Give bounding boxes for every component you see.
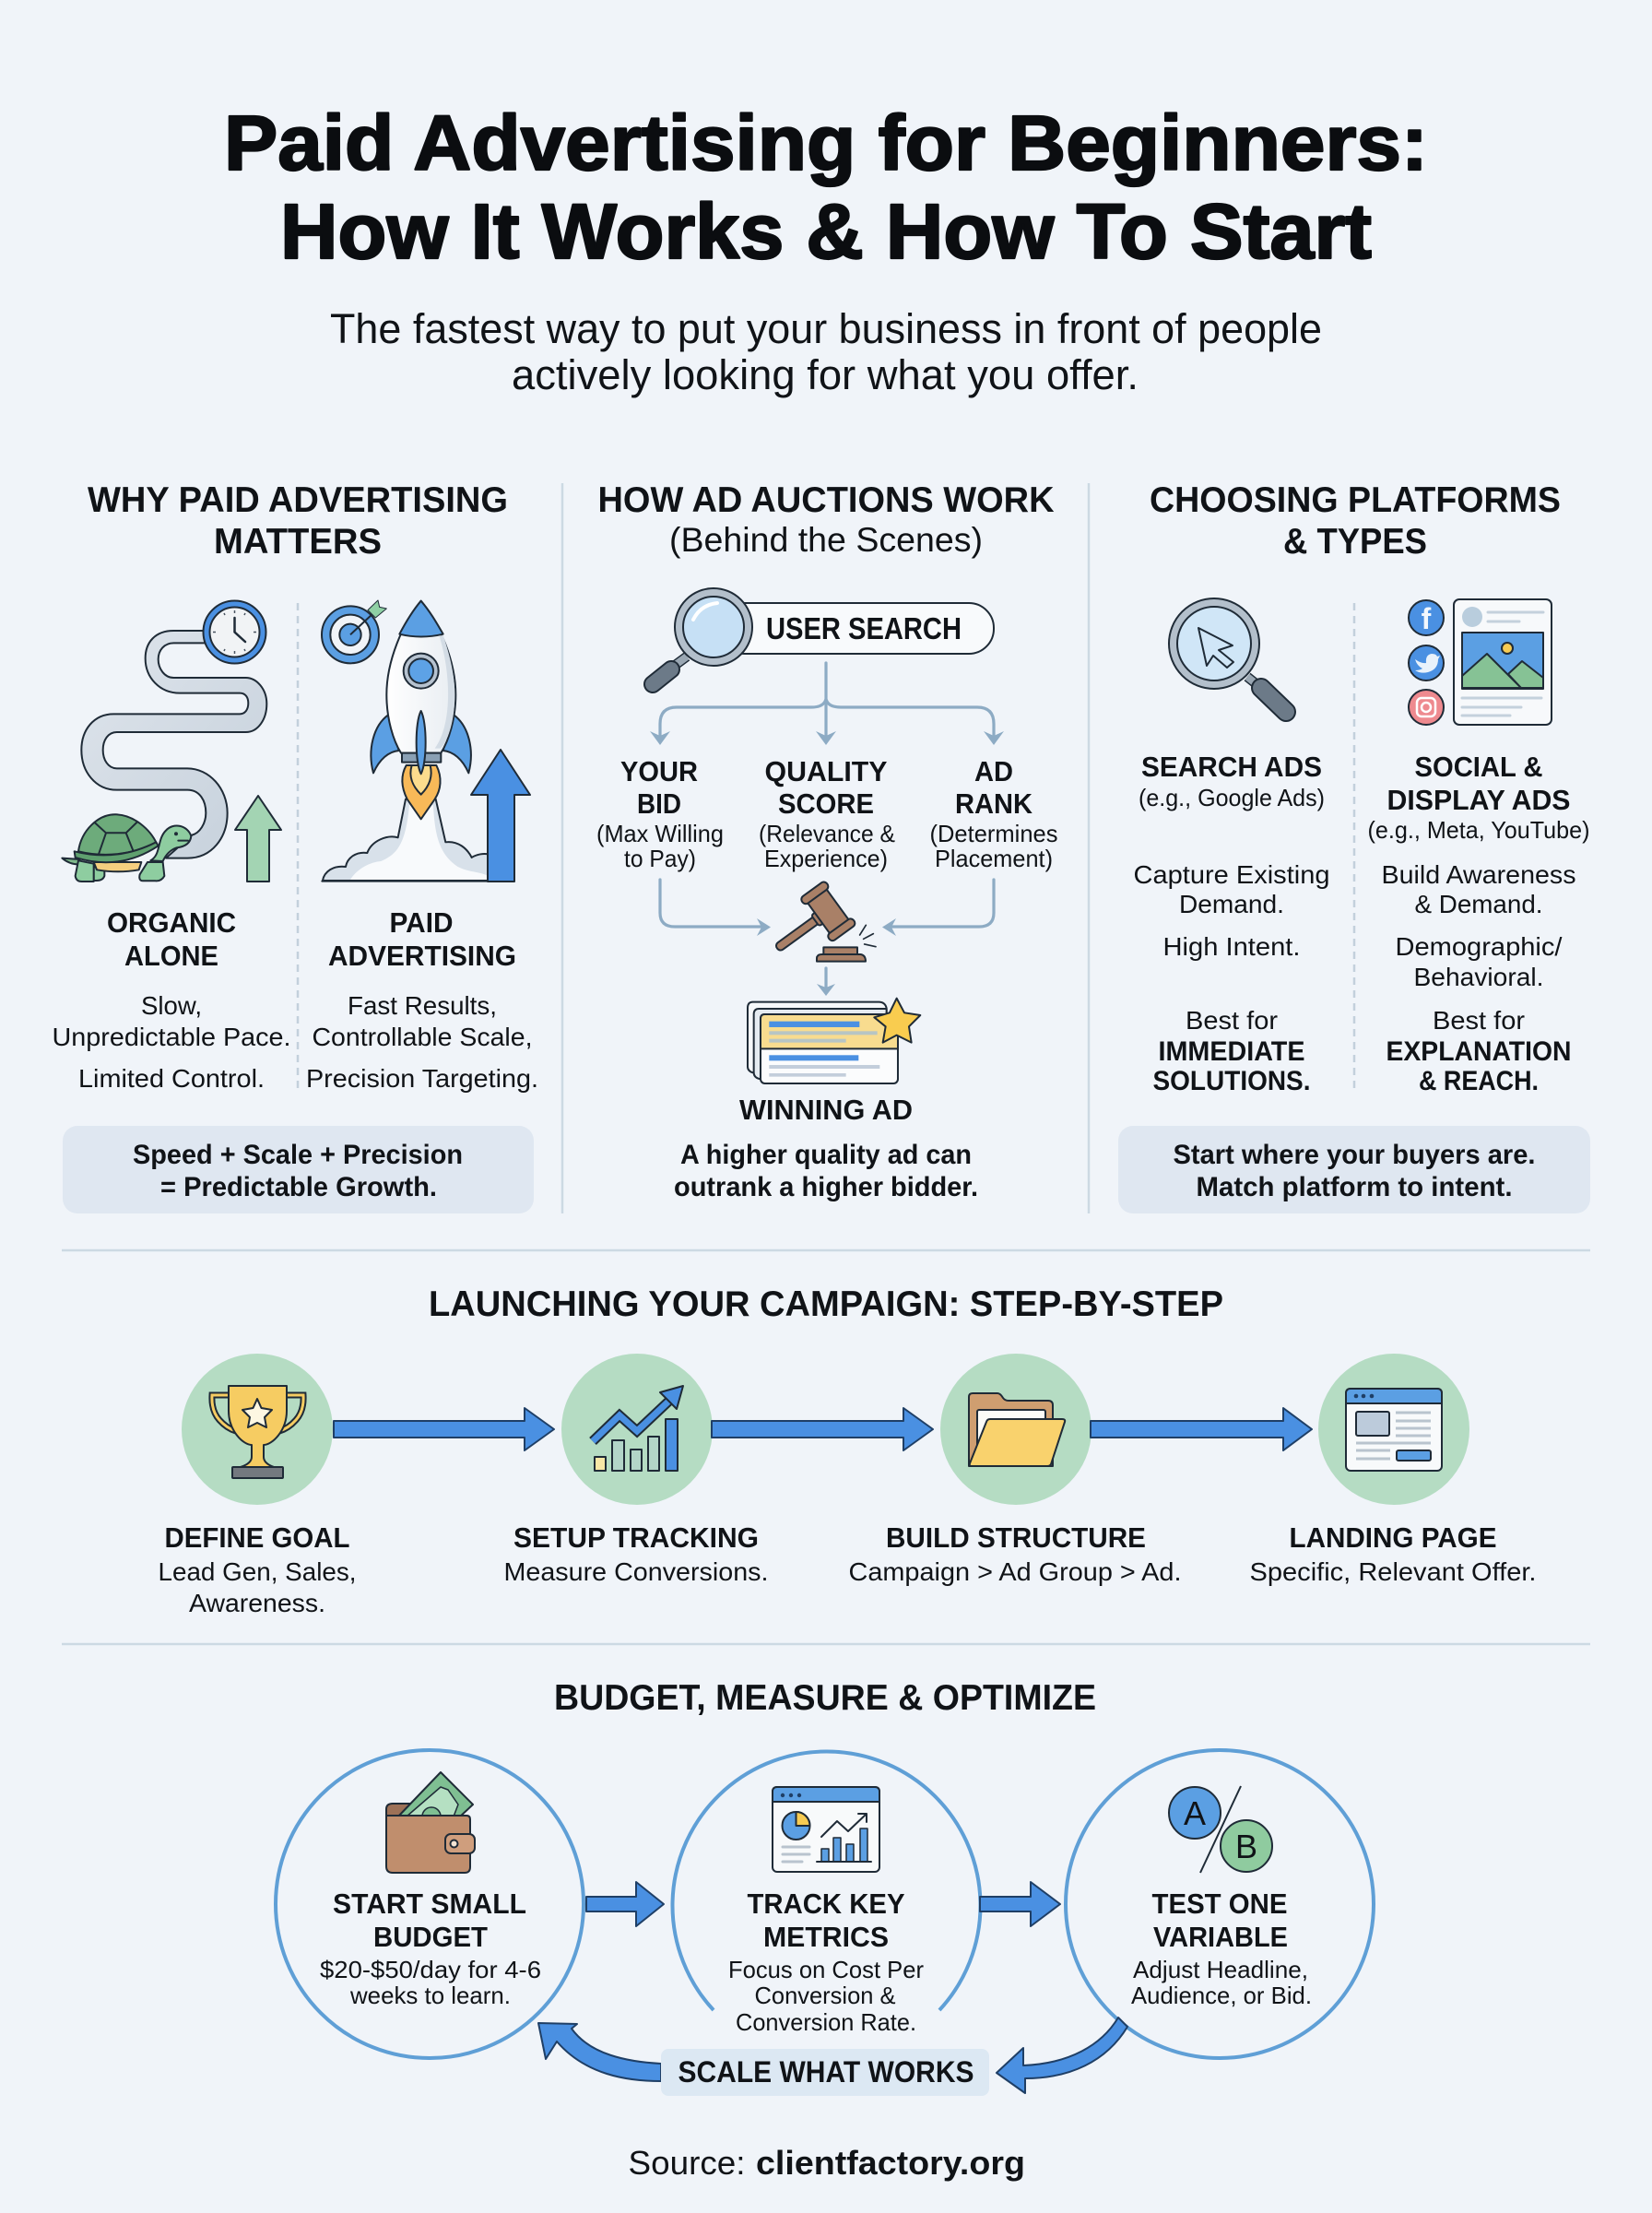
source credit: [629, 2144, 1025, 2182]
text: start small budget: BUDGET: [373, 1921, 488, 1953]
callout: start where buyers are: Start where your buyers are.: [1173, 1140, 1536, 1170]
callout: predictable growth: = Predictable Growth.: [160, 1172, 437, 1202]
title: How It Works & How To Start: [280, 188, 1372, 275]
f letter: f: [1422, 602, 1432, 635]
icon: gavel: [761, 881, 876, 970]
text: auction takeaway: outrank a higher bidder.: [674, 1172, 978, 1202]
arrow: gavel to winning ad: [817, 968, 835, 996]
heading: choosing platforms: & TYPES: [1283, 522, 1427, 562]
text: test one variable: TEST ONE: [1152, 1888, 1287, 1920]
text: track key metrics: METRICS: [763, 1921, 889, 1953]
factor: your bid: to Pay): [624, 845, 696, 872]
icon: green up arrow: [235, 796, 281, 882]
text: organic description: Limited Control.: [78, 1064, 265, 1093]
column: social and display ads: Demographic/: [1396, 932, 1563, 961]
factor: ad rank: (Determines: [929, 820, 1058, 847]
text: track key metrics: Conversion Rate.: [736, 2008, 916, 2036]
text: start small budget: START SMALL: [333, 1888, 526, 1920]
icon: folder: [969, 1393, 1065, 1466]
column: search ads: IMMEDIATE: [1158, 1036, 1305, 1067]
callout: predictable growth: [63, 1126, 534, 1213]
icon: search cursor magnifier: [1169, 598, 1286, 712]
label: organic alone: [107, 906, 236, 972]
label: paid advertising: [328, 906, 516, 972]
label: paid advertising: PAID: [389, 906, 454, 939]
subtitle: The fastest way to put your business in front of people: [330, 305, 1322, 352]
column: search ads: Capture Existing: [1134, 860, 1329, 889]
heading: how ad auctions work: [597, 480, 1055, 559]
column: search ads: Best for: [1186, 1006, 1278, 1035]
factor: quality score: Experience): [764, 845, 888, 872]
arrow: scale to start: [538, 2023, 661, 2081]
text: organic description: Slow,: [141, 991, 202, 1020]
arrows: search to factors: [650, 663, 1004, 745]
factor: ad rank: RANK: [955, 787, 1033, 820]
step: landing page: [1250, 1521, 1536, 1586]
step: setup tracking: [503, 1521, 769, 1586]
column: social and display ads: [1368, 751, 1589, 1096]
column: social and display ads: EXPLANATION: [1386, 1036, 1571, 1067]
arrows: cycle forward: [586, 1882, 1060, 1926]
text: paid description: [306, 991, 538, 1093]
icon: a/b test: [1169, 1786, 1272, 1873]
text: organic description: Unpredictable Pace.: [52, 1023, 291, 1051]
text: auction takeaway: A higher quality ad can: [680, 1140, 972, 1170]
step: define goal: Lead Gen, Sales,: [159, 1557, 356, 1586]
column: search ads: SOLUTIONS.: [1152, 1066, 1311, 1096]
factor: ad rank: AD: [974, 755, 1013, 787]
callout: scale what works: SCALE WHAT WORKS: [678, 2055, 974, 2089]
factor: your bid: (Max Willing: [596, 820, 724, 847]
factor: your bid: BID: [637, 787, 681, 820]
search bar: USER SEARCH: [766, 611, 962, 645]
callout: start where buyers are: Match platform to intent.: [1197, 1172, 1512, 1202]
icon: wallet with cash: [386, 1772, 475, 1873]
step: landing page: Specific, Relevant Offer.: [1250, 1557, 1536, 1586]
text: start small budget: weeks to learn.: [349, 1982, 511, 2009]
heading: launching your campaign: LAUNCHING YOUR CAMPAIGN: STEP-BY-STEP: [429, 1284, 1223, 1324]
text: start small budget: [320, 1888, 541, 2009]
icon: rocket: [322, 601, 489, 882]
step: define goal: DEFINE GOAL: [164, 1521, 350, 1554]
heading: why paid advertising matters: WHY PAID ADVERTISING: [88, 480, 508, 520]
column: social and display ads: SOCIAL &: [1414, 751, 1543, 783]
icon: turtle: [62, 814, 191, 882]
icon: landing page: [1346, 1389, 1442, 1471]
panel: how ad auctions work: [596, 480, 1058, 1202]
text: paid description: Fast Results,: [348, 991, 497, 1020]
factor: quality score: QUALITY: [765, 755, 888, 787]
panel: why paid advertising matters: [52, 480, 538, 1213]
label: winning ad: WINNING AD: [739, 1094, 913, 1126]
heading: why paid advertising matters: [88, 480, 508, 562]
step: setup tracking: Measure Conversions.: [503, 1557, 769, 1586]
column: search ads: (e.g., Google Ads): [1139, 784, 1325, 811]
heading: choosing platforms: CHOOSING PLATFORMS: [1150, 480, 1561, 520]
text: start small budget: $20-$50/day for 4-6: [320, 1956, 541, 1983]
source credit: Source:: [629, 2144, 745, 2182]
heading: budget measure optimize: BUDGET, MEASURE & OPTIMIZE: [554, 1678, 1096, 1718]
icon: clock: [203, 601, 266, 664]
heading: choosing platforms: [1150, 480, 1561, 562]
heading: why paid advertising matters: MATTERS: [214, 522, 382, 562]
title: [224, 100, 1428, 275]
icon: a/b test: B: [1235, 1828, 1257, 1865]
column: social and display ads: Build Awareness: [1381, 860, 1576, 889]
icon: social media: [1409, 599, 1552, 725]
factor: quality score: SCORE: [778, 787, 874, 820]
icon: winning ad cards: [748, 999, 920, 1083]
panel: launching your campaign: [159, 1284, 1536, 1617]
label: paid advertising: ADVERTISING: [328, 940, 516, 972]
callout: scale what works: [661, 2049, 989, 2096]
text: paid description: Controllable Scale,: [312, 1023, 533, 1051]
step: landing page: LANDING PAGE: [1289, 1521, 1497, 1554]
arrows: step connectors: [334, 1408, 1312, 1450]
step: build structure: BUILD STRUCTURE: [886, 1521, 1146, 1554]
column: search ads: SEARCH ADS: [1141, 751, 1322, 783]
text: test one variable: Adjust Headline,: [1133, 1956, 1308, 1983]
label: organic alone: ORGANIC: [107, 906, 236, 939]
column: social and display ads: (e.g., Meta, YouTube): [1368, 816, 1589, 844]
title: Paid Advertising for Beginners:: [224, 100, 1428, 186]
step: define goal: [159, 1521, 356, 1617]
column: social and display ads: DISPLAY ADS: [1386, 784, 1571, 816]
column: search ads: High Intent.: [1163, 932, 1300, 961]
icon: a/b test: A: [1184, 1794, 1206, 1832]
step: build structure: [848, 1521, 1182, 1586]
column: search ads: [1134, 751, 1329, 1096]
column: search ads: Demand.: [1179, 890, 1284, 918]
icon: target: [322, 600, 386, 663]
heading: how ad auctions work: HOW AD AUCTIONS WORK: [597, 480, 1055, 520]
factor: quality score: [759, 755, 895, 872]
step: setup tracking: SETUP TRACKING: [513, 1521, 759, 1554]
text: track key metrics: Focus on Cost Per: [728, 1956, 924, 1983]
icon: analytics dashboard: [773, 1787, 879, 1872]
text: track key metrics: [728, 1888, 924, 2036]
icon: growth chart: [593, 1386, 683, 1471]
icon: blue up arrow: [471, 750, 530, 882]
column: social and display ads: & Demand.: [1414, 890, 1543, 918]
text: organic description: [52, 991, 291, 1093]
callout: start where buyers are: [1118, 1126, 1590, 1213]
text: auction takeaway: [674, 1140, 978, 1202]
icon: winding road: [81, 631, 266, 858]
text: track key metrics: Conversion &: [754, 1982, 896, 2009]
subtitle: actively looking for what you offer.: [512, 351, 1139, 398]
factor: your bid: YOUR: [620, 755, 698, 787]
column: social and display ads: & REACH.: [1419, 1066, 1539, 1096]
factor: ad rank: [929, 755, 1058, 872]
step circles: [182, 1354, 1469, 1505]
factor: ad rank: Placement): [935, 845, 1053, 872]
column: social and display ads: Best for: [1433, 1006, 1525, 1035]
subtitle: [330, 305, 1322, 398]
factor: quality score: (Relevance &: [759, 820, 895, 847]
arrow: test to scale: [997, 2018, 1127, 2093]
step: build structure: Campaign > Ad Group > Ad.: [848, 1557, 1182, 1586]
source credit: clientfactory.org: [756, 2144, 1025, 2182]
panel: choosing platforms and types: [1118, 480, 1590, 1213]
factor: your bid: [596, 755, 724, 872]
step: define goal: Awareness.: [189, 1589, 325, 1617]
panel: budget, measure and optimize: [276, 1678, 1374, 2096]
text: track key metrics: TRACK KEY: [747, 1888, 905, 1920]
arrows: factors to gavel: [660, 880, 994, 936]
label: organic alone: ALONE: [124, 940, 218, 972]
smoke cloud: [323, 799, 489, 881]
cycle circles: [276, 1750, 1374, 2058]
text: paid description: Precision Targeting.: [306, 1064, 538, 1093]
column: social and display ads: Behavioral.: [1414, 963, 1543, 991]
text: test one variable: [1131, 1888, 1312, 2009]
icon: trophy: [212, 1386, 303, 1478]
icon: magnifying glass: [653, 588, 752, 684]
callout: predictable growth: Speed + Scale + Precision: [133, 1140, 463, 1170]
heading: how ad auctions work: (Behind the Scenes): [669, 521, 983, 559]
text: test one variable: VARIABLE: [1153, 1921, 1288, 1953]
text: test one variable: Audience, or Bid.: [1131, 1982, 1312, 2009]
search bar: [720, 603, 994, 654]
